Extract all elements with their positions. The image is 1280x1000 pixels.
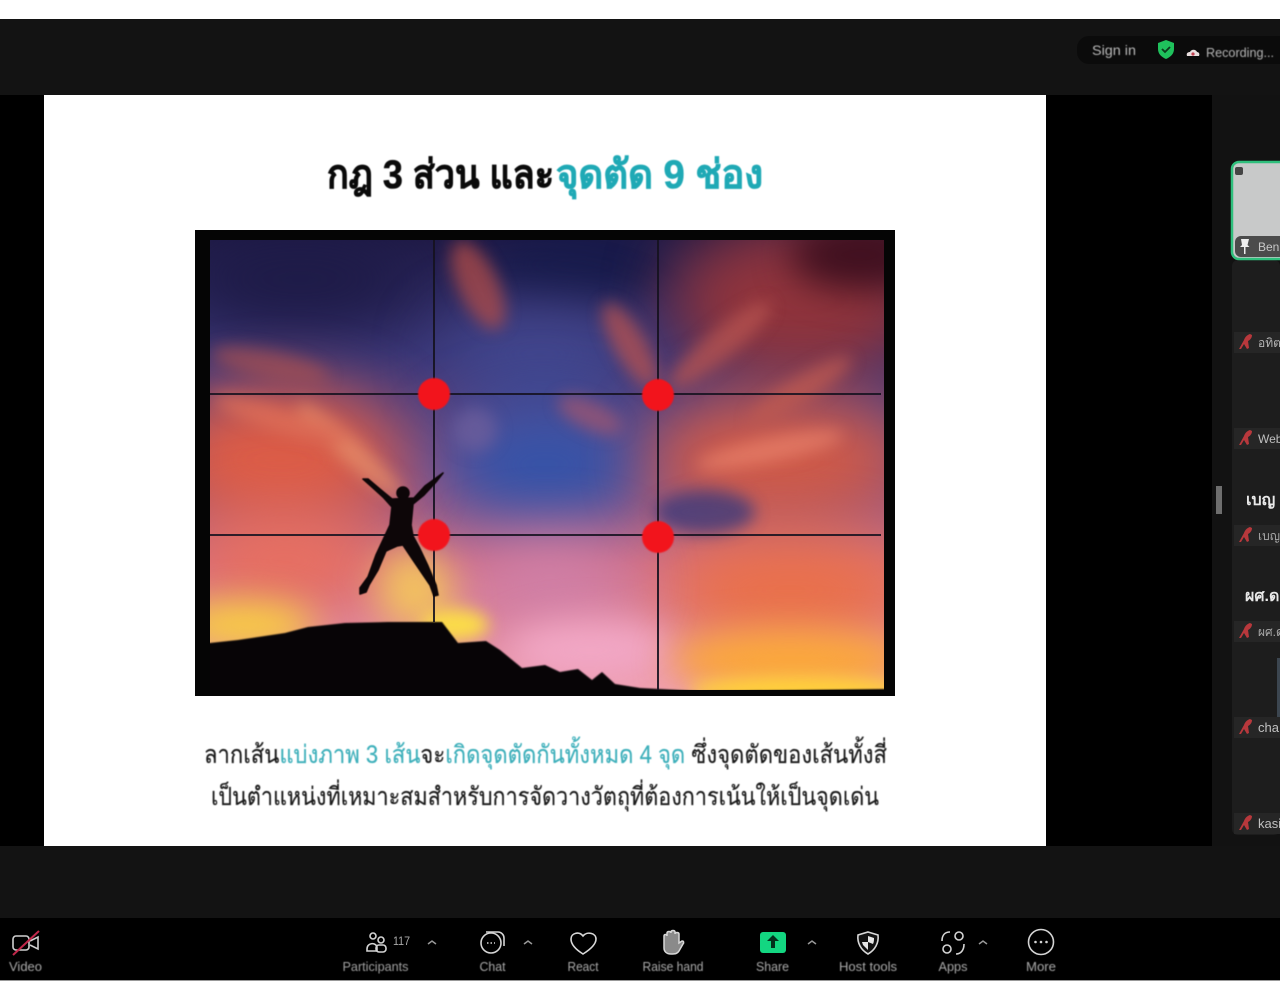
button: video (9, 931, 42, 974)
caption text (204, 736, 887, 812)
icon: apps (942, 932, 964, 954)
button: participants: 117 (393, 934, 410, 948)
participant: row 2 (1234, 428, 1280, 449)
title: กฎ 3 ส่วน และ (327, 153, 554, 197)
participant: row 4: ผศ.ด (1245, 588, 1279, 605)
sunset sky (210, 240, 884, 690)
participant: row 3: เบญ (1258, 529, 1280, 543)
button: chat: Chat (480, 959, 506, 974)
participant: row 6 (1234, 813, 1280, 834)
button: apps: Apps (938, 959, 968, 974)
participant: active speaker: Ben (1258, 240, 1279, 254)
caption line 2: เป็นตำแหน่งที่เหมาะสมสำหรับการจัดวางวัตถุที่ต้องการเน้นให้เป็นจุดเด่น (211, 779, 879, 812)
toolbar (9, 930, 1056, 974)
grid lines (210, 240, 881, 690)
button: more (1026, 930, 1056, 974)
hill silhouette (210, 620, 884, 690)
button: raise hand (642, 930, 704, 974)
button: react (568, 933, 599, 974)
sign in label: Sign in (1092, 42, 1136, 58)
button: host tools: Host tools (839, 959, 897, 974)
button: raise hand: Raise hand (642, 959, 704, 974)
title (327, 153, 763, 200)
button: more: More (1026, 959, 1056, 974)
participant: row 3 (1234, 492, 1280, 546)
button: share: Share (756, 959, 789, 974)
participant: row 5 (1234, 658, 1280, 738)
button: apps (938, 932, 987, 974)
icon: cloud recording (1187, 50, 1199, 56)
icon: chat (481, 932, 504, 953)
panel: presentation slide (44, 95, 1046, 846)
icon: more (1028, 930, 1054, 954)
button: share (756, 932, 816, 974)
jumping figure silhouette (360, 473, 443, 596)
button: participants (342, 933, 436, 974)
photo: rule of thirds silhouette at sunset (195, 230, 895, 696)
intersection points (418, 378, 674, 553)
icon: participants (367, 933, 386, 952)
participant: active speaker (1232, 162, 1280, 259)
splitter handle (1216, 486, 1222, 514)
button: participants: Participants (342, 959, 409, 974)
icon: hand (664, 930, 684, 954)
title: จุดตัด 9 ช่อง (556, 153, 763, 200)
participant: row 4 (1234, 588, 1280, 642)
button: host tools (839, 932, 897, 974)
icon: security shield (1158, 40, 1174, 59)
status bar: sign in and recording (1077, 36, 1280, 64)
recording label: Recording... (1206, 45, 1274, 60)
cloud wisps (208, 233, 858, 534)
button: video: Video (9, 959, 42, 974)
icon: heart (571, 933, 596, 954)
participant: row 5: cha (1258, 720, 1280, 735)
participant: row 3: เบญ (1246, 492, 1275, 510)
button: react: React (568, 959, 599, 974)
icon: video off (13, 931, 39, 955)
icon: shield (858, 932, 878, 954)
icon: share (760, 932, 786, 953)
participant: row 1 (1234, 332, 1280, 353)
button: chat (480, 932, 532, 974)
panel: participant gallery (1216, 162, 1280, 835)
caption line 1: ลากเส้นแบ่งภาพ 3 เส้นจะเกิดจุดตัดกันทั้งหมด 4 จุด ซึ่งจุดตัดของเส้นทั้งสี่ (204, 736, 887, 770)
